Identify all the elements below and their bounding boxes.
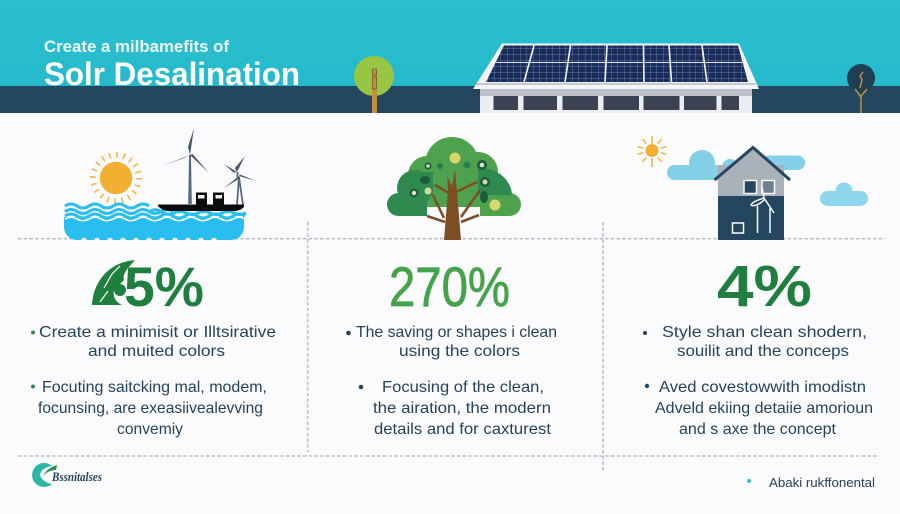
- footer logo: [32, 463, 102, 487]
- bullets: souilit and the conceps: [677, 343, 849, 360]
- bullets: using the colors: [399, 343, 520, 360]
- bullets: Adveld ekiing detaiie amorioun: [655, 400, 873, 417]
- bullets: Focuting saitcking mal, modem,: [42, 379, 267, 396]
- bullets: and muited colors: [88, 343, 225, 360]
- bullets: the airation, the modern: [373, 400, 551, 417]
- stat: 270%: 270%: [389, 255, 510, 318]
- tree crown: [387, 137, 521, 217]
- bullets: [643, 324, 873, 438]
- footer logo: Bssnitalses: [51, 470, 102, 484]
- tree badges: [410, 152, 500, 210]
- illustration: tree: [387, 137, 521, 240]
- stat column 1: [31, 255, 276, 438]
- illustration: sun, sea and wind: [64, 128, 256, 243]
- bullets: [346, 324, 557, 438]
- icon: water: [64, 204, 246, 243]
- icon: house: [714, 148, 790, 240]
- tree trunk: [427, 169, 480, 240]
- bullets: details and for caxturest: [374, 421, 552, 438]
- icon: small wind turbine: [224, 156, 256, 205]
- bullets: Focusing of the clean,: [382, 379, 544, 396]
- bullets: Create a minimisit or Illtsirative: [39, 324, 276, 341]
- solar building: [473, 44, 759, 113]
- bullets: Aved covestowwith imodistn: [659, 379, 866, 396]
- bullets: [31, 324, 276, 438]
- bullets: Style shan clean shodern,: [662, 324, 867, 341]
- icon: large wind turbine: [162, 128, 209, 204]
- stat column 2: [346, 255, 557, 438]
- crown gaps: [427, 207, 480, 217]
- header subtitle: Create a milbamefits of: [44, 37, 229, 56]
- illustration: house and sky: [638, 136, 868, 240]
- stat: 5%: 5%: [124, 255, 204, 318]
- stat: 4%: 4%: [717, 254, 812, 319]
- icon: cloud left: [667, 150, 805, 180]
- icon: sun: [93, 155, 139, 201]
- solar panels: [486, 46, 748, 82]
- icon: dark tree: [847, 64, 875, 113]
- icon: green tree: [354, 56, 394, 113]
- header title: Solr Desalination: [44, 56, 300, 92]
- bullets: focunsing, are exeasiivealevving: [38, 400, 263, 417]
- icon: small sun: [638, 136, 666, 167]
- building windows: [494, 96, 739, 110]
- icon: cloud right: [820, 182, 868, 206]
- bullets: The saving or shapes i clean: [356, 324, 557, 341]
- bullets: and s axe the concept: [679, 421, 837, 438]
- stat column 3: [643, 254, 873, 438]
- dashed dividers: [18, 222, 885, 470]
- bullets: convemiy: [117, 421, 183, 438]
- header panel: [0, 0, 900, 113]
- icon: leaf badge: [92, 260, 135, 305]
- icon: boat: [158, 192, 244, 211]
- footer note: Abaki rukffonental: [769, 476, 875, 490]
- icon: house turbine: [751, 187, 774, 233]
